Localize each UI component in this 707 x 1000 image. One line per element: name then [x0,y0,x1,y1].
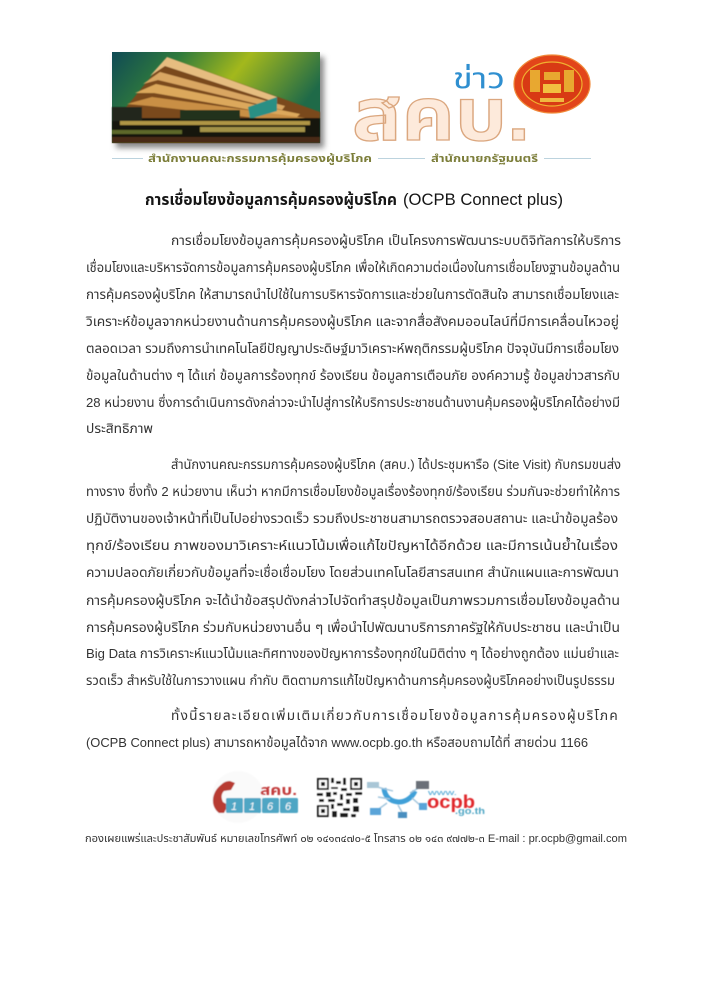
title [145,188,563,210]
logo text: OCPB abbreviation: สคบ. [352,73,530,156]
tagline rule right [544,158,591,159]
hotline 1166 badge [212,771,298,823]
logo text: news: ข่าว [453,63,505,95]
paragraph 1 [85,231,621,436]
network icon [367,781,429,818]
QR code [317,778,362,817]
paragraph 1: การเชื่อมโยงข้อมูลการคุ้มครองผู้บริโภค เป็นโครงการพัฒนาระบบดิจิทัลการให้บริการ [171,231,621,248]
title: การเชื่อมโยงข้อมูลการคุ้มครองผู้บริโภค [145,188,397,210]
photo: government building [112,52,324,148]
paragraph 1: ข้อมูลในด้านต่าง ๆ ได้แก่ ข้อมูลการร้องทุกข์ ร้องเรียน ข้อมูลการเตือนภัย องค์ความรู้ ข้อมูลข่าวสารกับ [86,368,620,383]
paragraph 2 [86,457,621,688]
footer contact line: กองเผยแพร่และประชาสัมพันธ์ หมายเลขโทรศัพท์ ๐๒ ๑๔๑๓๔๗๐-๕ โทรสาร ๐๒ ๑๔๓ ๙๗๗๒-๓ E-mail : pr.ocpb@gmail.com [85,832,627,845]
tagline: office name: สำนักงานคณะกรรมการคุ้มครองผู้บริโภค [148,152,372,165]
paragraph 3: (OCPB Connect plus) สามารถหาข้อมูลได้จาก www.ocpb.go.th หรือสอบถามได้ที่ สายด่วน 1166 [86,733,588,750]
tagline rule left [112,158,143,159]
paragraph 1: การคุ้มครองผู้บริโภค ให้สามารถนำไปใช้ในการบริหารจัดการและช่วยในการตัดสินใจ สามารถเชื่อมโยงและ [86,285,619,302]
paragraph 3 [86,706,619,750]
hotline 1166 badge: สคบ. [260,782,297,798]
hotline 1166 badge: 1 [249,801,255,813]
paragraph 1: 28 หน่วยงาน ซึ่งการดำเนินการดังกล่าวจะนำไปสู่การให้บริการประชาชนด้านงานคุ้มครองผู้บริโภคได้อย่างมี [86,393,620,410]
seal [514,55,590,113]
website logo [426,788,485,816]
contact icons row [212,771,485,823]
website logo: www. [426,788,457,797]
title: (OCPB Connect plus) [403,191,563,209]
paragraph 2: การคุ้มครองผู้บริโภค จะได้นำข้อสรุปดังกล่าวไปจัดทำสรุปข้อมูลเป็นภาพรวมการเชื่อมโยงข้อมูลด้าน [86,591,620,608]
website logo: ocpb [427,792,475,812]
paragraph 2: Big Data การวิเคราะห์แนวโน้มและทิศทางของปัญหาการร้องทุกข์ในมิติต่าง ๆ ได้อย่างถูกต้อง แม่นยำและ [86,646,619,661]
website logo: .go.th [455,806,485,816]
paragraph 1: วิเคราะห์ข้อมูลจากหน่วยงานด้านการคุ้มครองผู้บริโภค และจากสื่อสังคมออนไลน์ที่มีการเคลื่อนไหวอยู่ [85,312,619,329]
paragraph 2: การคุ้มครองผู้บริโภค ร่วมกับหน่วยงานอื่น ๆ เพื่อนำไปพัฒนาบริการภาครัฐให้กับประชาชน และนำเป็น [86,618,620,635]
tagline rule middle [378,158,425,159]
paragraph 1: ประสิทธิภาพ [86,421,153,436]
hotline 1166 badge: 6 [285,801,292,813]
paragraph 2: ทุกข์/ร้องเรียน ภาพของมาวิเคราะห์แนวโน้มเพื่อแก้ไขปัญหาได้อีกด้วย และมีการเน้นย้ำในเรื่อง [86,536,618,553]
hotline 1166 badge: 1 [231,801,237,813]
paragraph 3: ทั้งนี้รายละเอียดเพิ่มเติมเกี่ยวกับการเชื่อมโยงข้อมูลการคุ้มครองผู้บริโภค [171,706,619,723]
paragraph 2: สำนักงานคณะกรรมการคุ้มครองผู้บริโภค (สคบ.) ได้ประชุมหารือ (Site Visit) กับกรมขนส่ง [171,457,621,472]
paragraph 1: เชื่อมโยงและบริหารจัดการข้อมูลการคุ้มครองผู้บริโภค เพื่อให้เกิดความต่อเนื่องในการเชื่อมโยงฐานข้อมูลด้าน [86,258,620,275]
paragraph 2: รวดเร็ว สำหรับใช้ในการวางแผน กำกับ ติดตามการแก้ไขปัญหาด้านการคุ้มครองผู้บริโภคอย่างเป็นรูปธรรม [86,673,615,688]
paragraph 1: ตลอดเวลา รวมถึงการนำเทคโนโลยีปัญญาประดิษฐ์มาวิเคราะห์พฤติกรรมผู้บริโภค ปัจจุบันมีการเชื่อมโยง [86,339,619,356]
paragraph 2: ปฏิบัติงานของเจ้าหน้าที่เป็นไปอย่างรวดเร็ว รวมถึงประชาชนสามารถตรวจสอบสถานะ และนำข้อมูลร้อง [86,509,618,526]
paragraph 2: ความปลอดภัยเกี่ยวกับข้อมูลที่จะเชื่อเชื่อมโยง โดยส่วนเทคโนโลยีสารสนเทศ สำนักแผนและการพัฒนา [86,563,619,580]
paragraph 2: ทางราง ซึ่งทั้ง 2 หน่วยงาน เห็นว่า หากมีการเชื่อมโยงข้อมูลเรื่องร้องทุกข์/ร้องเรียน ร่วมกันจะช่วยทำให้การ [86,482,620,499]
tagline: prime minister office: สำนักนายกรัฐมนตรี [431,153,539,165]
hotline 1166 badge: 6 [267,801,274,813]
header banner [112,52,591,165]
